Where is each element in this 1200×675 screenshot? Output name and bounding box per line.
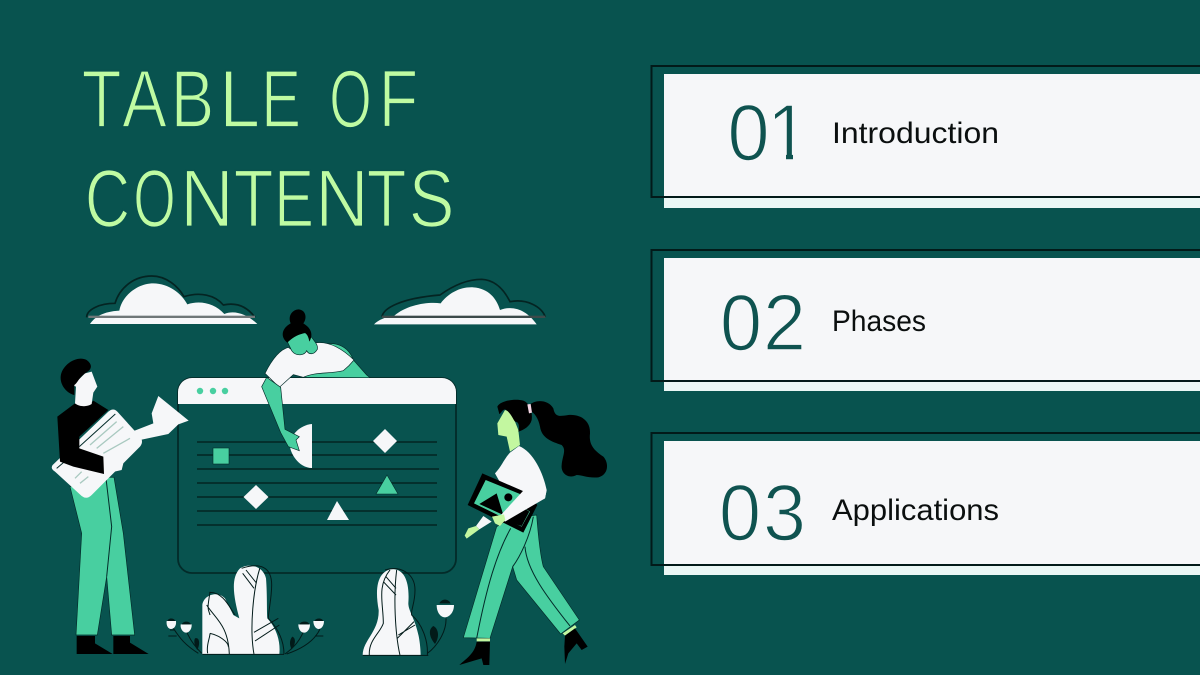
- number 02: [720, 278, 806, 367]
- number 03: 3: [763, 468, 806, 557]
- leaf shapes: [202, 566, 280, 654]
- title: F: [379, 54, 418, 145]
- title: L: [219, 54, 260, 145]
- half circle: [290, 424, 312, 468]
- hair: [497, 400, 532, 432]
- shoes: [77, 636, 149, 654]
- title: T: [367, 154, 406, 245]
- icon: right cloud: [374, 279, 545, 324]
- tablet: [468, 473, 537, 533]
- ponytail: [529, 401, 607, 478]
- icon: right plant: [363, 569, 454, 655]
- green triangle: [376, 475, 398, 494]
- torso: [57, 401, 108, 474]
- title: T: [82, 54, 121, 145]
- number 01: [728, 88, 810, 177]
- number 03: [719, 468, 806, 557]
- number 01: 1: [767, 88, 809, 177]
- figure: man holding document: [52, 359, 189, 654]
- flowers left: [167, 618, 202, 653]
- figure: woman at top of window: [265, 309, 370, 387]
- title: E: [261, 54, 301, 145]
- title: A: [122, 54, 167, 145]
- head: [72, 372, 97, 406]
- label Applications: Applications: [832, 494, 999, 527]
- title: [82, 54, 454, 245]
- window header bar: [178, 378, 456, 404]
- flowers right: [285, 618, 324, 654]
- back hand: [465, 526, 479, 539]
- document clipboard: [52, 409, 142, 498]
- number 03: 0: [719, 468, 761, 557]
- number 01: 0: [728, 88, 770, 177]
- figure: walking woman head and hair: [497, 400, 607, 478]
- front arm: [500, 483, 547, 522]
- icon: left cloud: [87, 276, 257, 324]
- title: T: [234, 154, 273, 245]
- arm and hand: [104, 396, 189, 474]
- label Introduction: Introduction: [832, 117, 999, 150]
- window dots: [197, 388, 228, 394]
- trousers: [70, 477, 135, 635]
- title: C: [85, 154, 130, 245]
- hair: [61, 359, 91, 395]
- title: E: [274, 154, 314, 245]
- figure: woman arm reaching: [262, 377, 299, 451]
- hair tie: [527, 404, 532, 413]
- figure: woman walking with tablet: [459, 446, 588, 665]
- panel: item 03 Applications: [652, 433, 1200, 575]
- title: N: [315, 154, 369, 245]
- hand on tablet: [492, 514, 505, 526]
- title: N: [180, 154, 234, 245]
- face and neck: [497, 410, 520, 452]
- boots: [459, 628, 588, 665]
- white diamond right: [373, 429, 397, 453]
- white triangle: [327, 501, 349, 520]
- browser window chart: [178, 378, 456, 573]
- green square: [213, 448, 229, 464]
- number 02: 0: [720, 278, 762, 367]
- title: B: [171, 54, 214, 145]
- white diamond left: [244, 485, 268, 509]
- panel: item 01 Introduction: [652, 66, 1200, 208]
- number 02: 2: [763, 278, 806, 367]
- label Phases: Phases: [832, 305, 926, 338]
- icon: left plant: [167, 566, 324, 654]
- title: S: [409, 154, 454, 245]
- panel: item 02 Phases: [652, 250, 1200, 391]
- title: O: [133, 154, 176, 245]
- title: O: [329, 54, 372, 145]
- trousers: [463, 515, 579, 638]
- ankles: [477, 625, 577, 641]
- back arm: [476, 516, 492, 529]
- shirt: [495, 446, 547, 510]
